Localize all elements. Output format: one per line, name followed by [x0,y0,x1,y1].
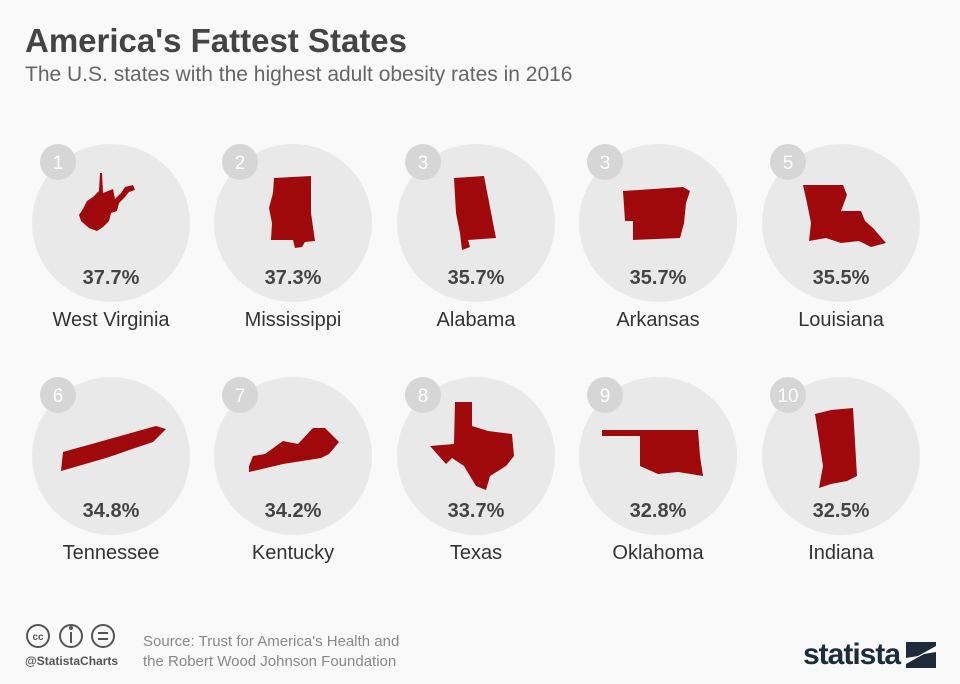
panel: Oklahoma: 32.8% [630,500,687,522]
panel: Mississippi [214,144,372,331]
panel: Kentucky: Kentucky [252,542,334,564]
panel: Texas: 8 [418,386,428,407]
panel: Mississippi: 2 [235,153,245,174]
panel: Alabama: Alabama [437,309,516,331]
panel: Mississippi: Mississippi [245,309,341,331]
panel: Alabama: 3 [418,153,428,174]
panel: Louisiana: Louisiana [798,309,885,331]
panel: Louisiana [762,144,920,331]
subtitle: The U.S. states with the highest adult obesity rates in 2016 [25,63,572,86]
panel: Tennessee: Tennessee [63,542,159,564]
panel: Arkansas [579,144,737,331]
panel: Mississippi: 37.3% [265,267,322,289]
panel: Texas [397,377,555,564]
panel: West Virginia: West Virginia [52,309,170,331]
panel: Tennessee: 34.8% [83,500,140,522]
panel: Indiana [762,377,920,564]
panel: Kentucky: 34.2% [265,500,322,522]
panel: Arkansas: 3 [600,153,610,174]
panel: Alabama [397,144,555,331]
title: America's Fattest States [25,22,407,59]
chart: state grid: cc [32,632,44,643]
panel: West Virginia: 1 [53,153,63,174]
panel: Oklahoma: Oklahoma [612,542,704,564]
panel: Louisiana: 35.5% [813,267,870,289]
source: the Robert Wood Johnson Foundation [143,653,396,670]
panel: Texas: Texas [450,542,502,564]
icon: cc license [27,625,114,647]
panel: West Virginia: 37.7% [83,267,140,289]
credit handle: @StatistaCharts [25,654,118,668]
logo: statista: statista [803,638,900,671]
panel: Arkansas: Arkansas [616,309,700,331]
panel: Kentucky: 7 [235,386,245,407]
panel: Louisiana: 5 [783,153,793,174]
panel: Oklahoma [579,377,737,564]
panel: Indiana: 32.5% [813,500,870,522]
panel: Arkansas: 35.7% [630,267,687,289]
panel: Texas: 33.7% [448,500,505,522]
source [143,633,399,670]
panel: Tennessee [32,377,190,564]
panel: Alabama: 35.7% [448,267,505,289]
panel: West Virginia [32,144,190,331]
panel: Indiana: Indiana [808,542,875,564]
panel: Oklahoma: 9 [600,386,610,407]
panel: Tennessee: 6 [53,386,63,407]
source: Source: Trust for America's Health and [143,633,399,650]
panel: Indiana: 10 [777,386,799,407]
panel: Kentucky [214,377,372,564]
